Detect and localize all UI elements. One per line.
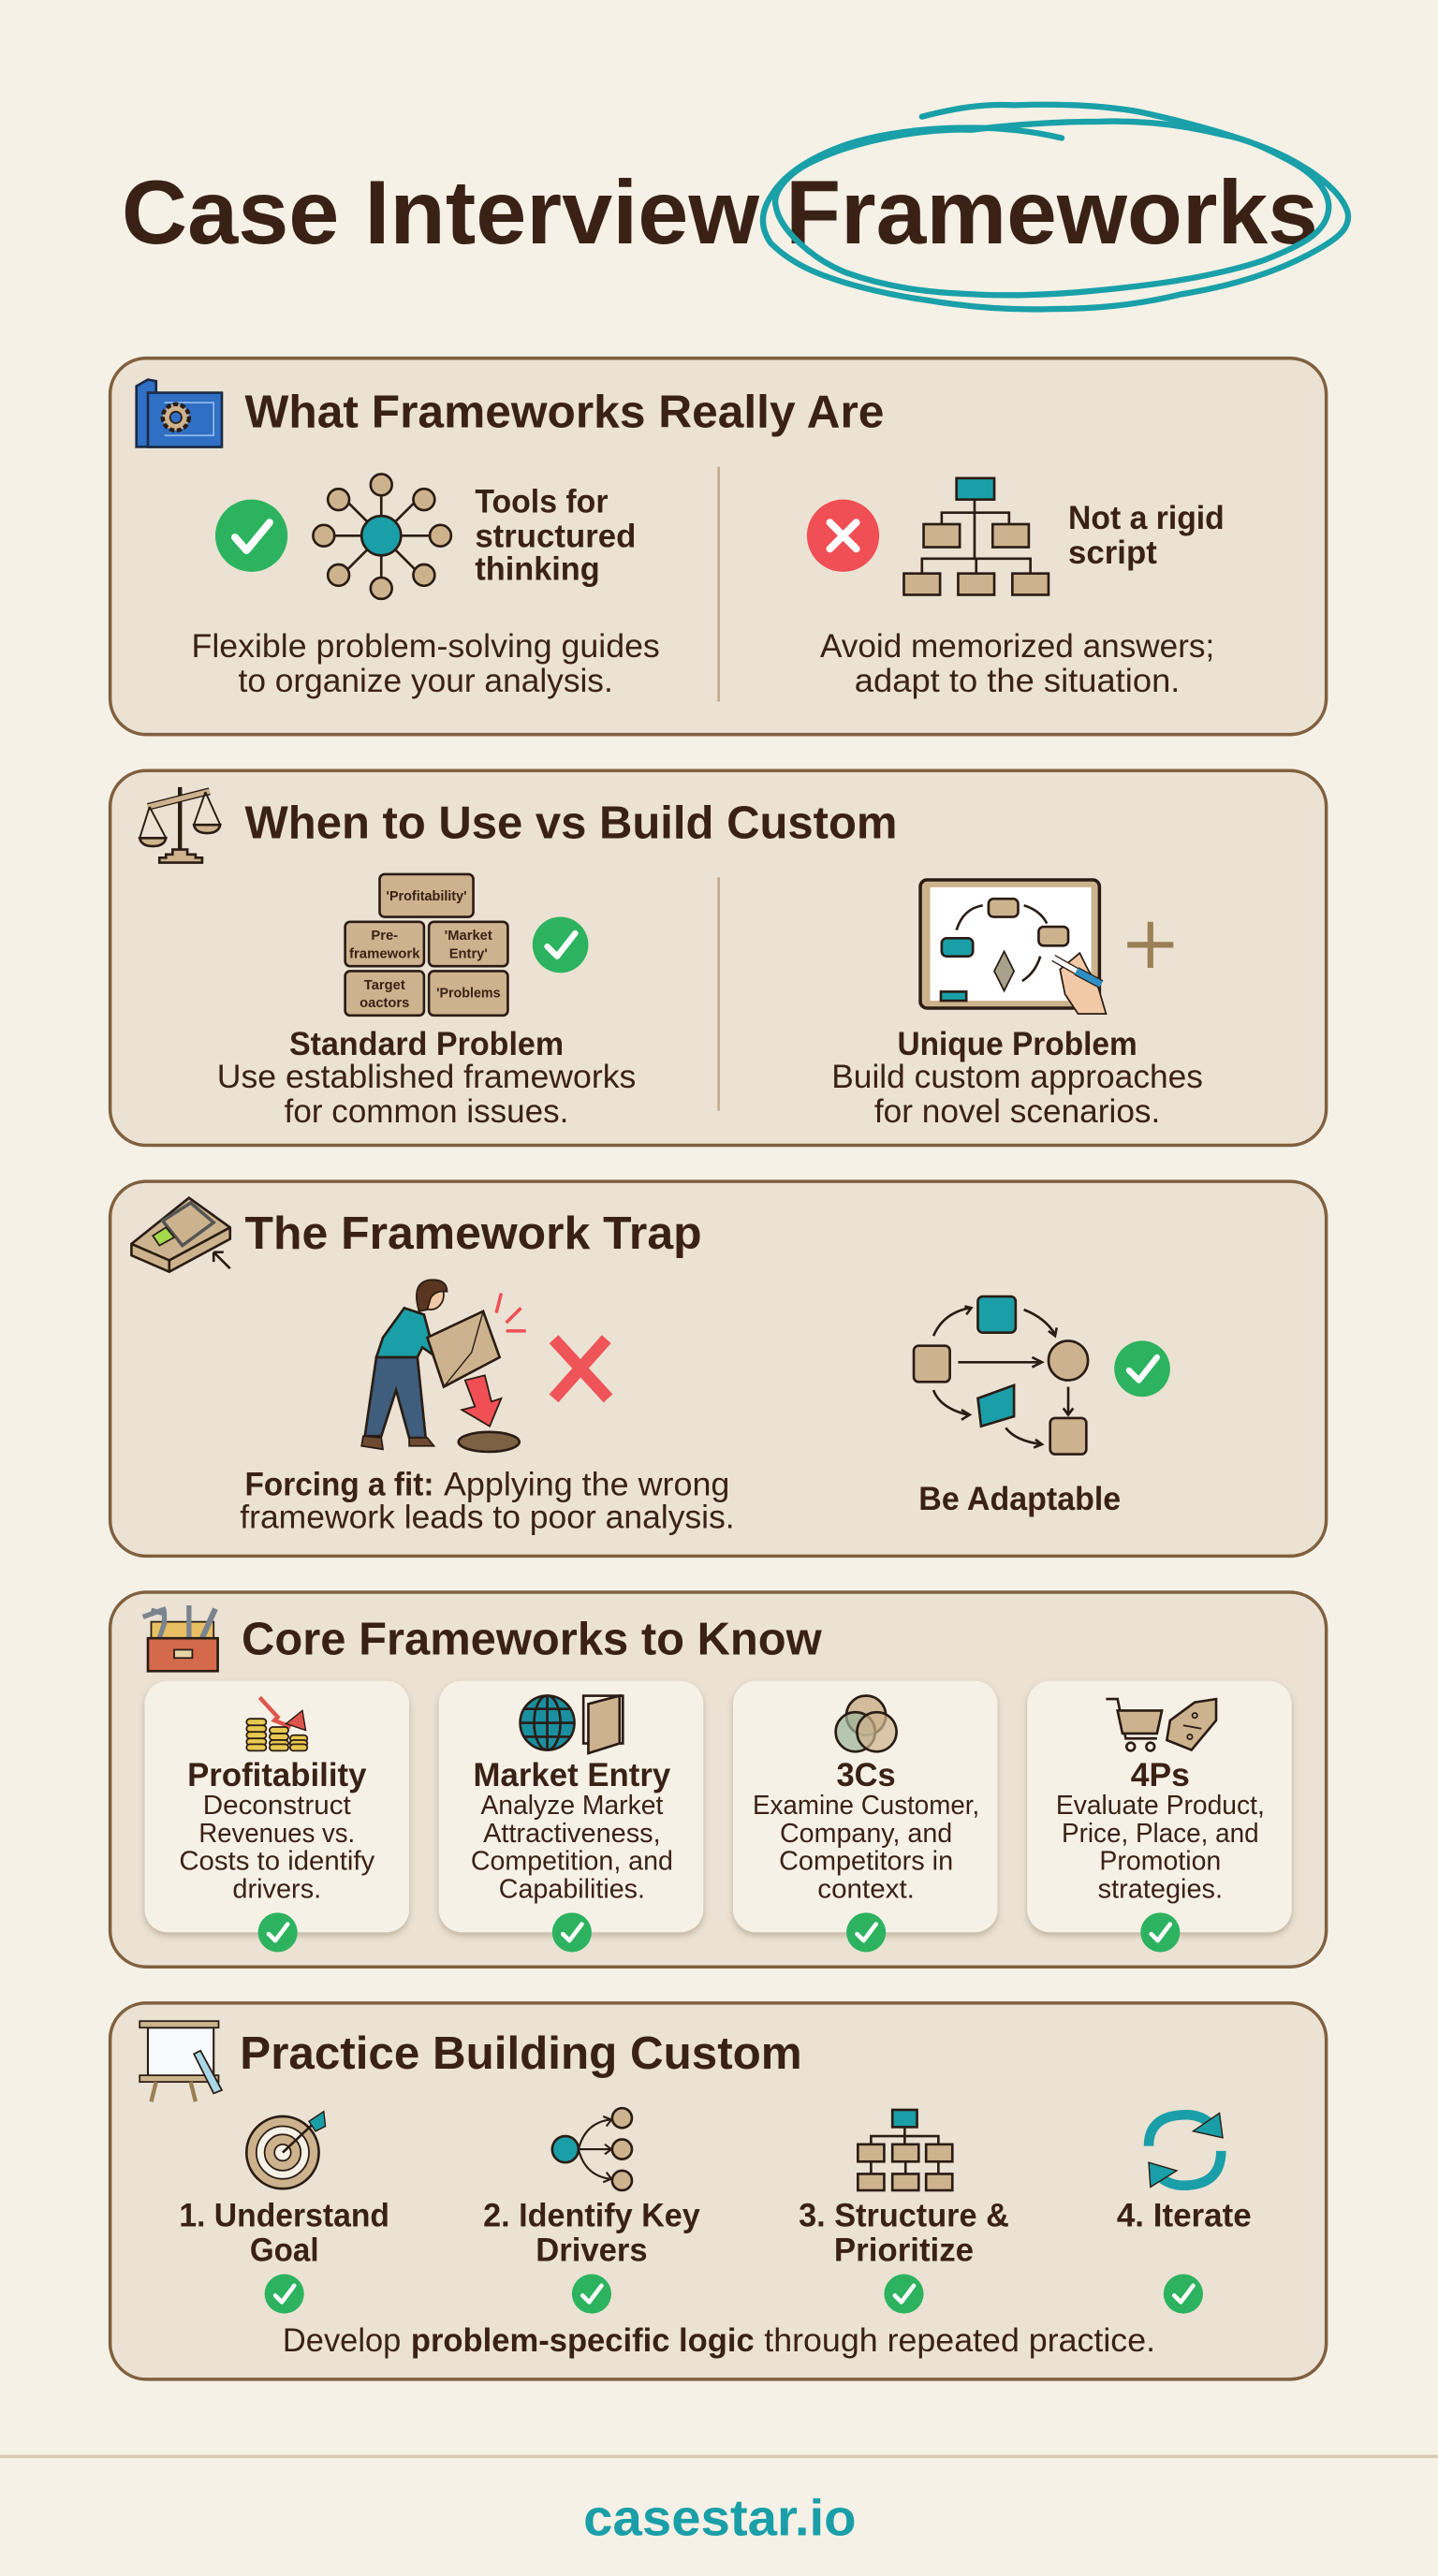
panel: When to Use vs Build Custom	[110, 770, 1327, 1146]
icon: check	[1164, 2275, 1203, 2314]
icon: framework blocks: Pre-	[371, 929, 398, 944]
text: unique problem	[831, 1026, 1203, 1130]
panel: Core Frameworks to Know	[110, 1592, 1327, 1967]
text: Examine Customer,	[753, 1791, 979, 1821]
text: avoid memorized answers	[820, 628, 1214, 699]
icon: tree structure	[858, 2110, 952, 2190]
heading: Practice Building Custom	[240, 2028, 802, 2079]
icon: cycle arrows	[1149, 2113, 1223, 2187]
icon: check	[884, 2275, 924, 2314]
step 1: understand goal	[179, 2112, 389, 2314]
icon: hub and spoke network	[313, 474, 451, 599]
text: Revenues vs.	[198, 1819, 355, 1849]
icon: check	[846, 1912, 886, 1952]
label: 2. Identify Key	[483, 2198, 700, 2234]
icon: framework blocks: 'Market	[445, 929, 492, 944]
icon: framework blocks: oactors	[360, 996, 409, 1011]
text	[1056, 1757, 1265, 1905]
text: avoid memorized answers: Avoid memorized answers;	[820, 628, 1214, 665]
heading: The Framework Trap	[245, 1208, 702, 1259]
icon: mousetrap	[131, 1198, 230, 1272]
icon: toolbox	[143, 1605, 218, 1671]
icon: whiteboard with hand	[920, 880, 1106, 1014]
label: tools for structured thinking: thinking	[475, 551, 600, 588]
label: tools for structured thinking	[475, 484, 636, 588]
card: Profitability	[144, 1681, 409, 1952]
text: develop logic: through repeated practice.	[764, 2322, 1155, 2359]
text: Evaluate Product,	[1056, 1791, 1265, 1821]
icon: cart and price tag	[1106, 1699, 1216, 1750]
text: Competitors in	[779, 1847, 953, 1877]
card: 3Cs	[733, 1681, 998, 1952]
icon: venn diagram	[836, 1696, 897, 1751]
text: Market Entry	[474, 1757, 671, 1793]
label: Prioritize	[834, 2232, 974, 2268]
label: 3. Structure &	[799, 2198, 1009, 2234]
icon: framework blocks: Entry'	[449, 946, 488, 961]
text: develop logic	[283, 2322, 1155, 2359]
text: flexible guides: Flexible problem-solving guides	[192, 628, 660, 665]
heading: What Frameworks Really Are	[245, 387, 884, 437]
text: unique problem: Unique Problem	[897, 1026, 1137, 1062]
label	[799, 2198, 1009, 2268]
text: standard problem	[217, 1026, 636, 1130]
text: Deconstruct	[203, 1791, 351, 1821]
text: standard problem: Use established frameworks	[217, 1059, 636, 1095]
text	[471, 1757, 673, 1905]
icon: framework blocks: framework	[349, 946, 420, 961]
title: Case Interview	[122, 163, 760, 263]
panel: Practice Building Custom	[110, 2003, 1327, 2379]
text: forcing a fit	[240, 1466, 735, 1536]
text: avoid memorized answers: adapt to the situation.	[855, 663, 1180, 699]
text: context.	[817, 1875, 915, 1905]
icon: framework blocks: 'Profitability'	[387, 889, 467, 904]
title	[122, 163, 1318, 263]
label: not a rigid script	[1068, 500, 1225, 571]
text: develop logic: problem-specific logic	[411, 2322, 755, 2359]
label: Goal	[250, 2232, 319, 2268]
icon: falling coins	[246, 1697, 307, 1750]
step 4: iterate	[1117, 2113, 1252, 2314]
icon: easel board	[139, 2021, 222, 2101]
text: standard problem: for common issues.	[285, 1093, 568, 1130]
footer brand: casestar.io	[583, 2490, 857, 2547]
label: not a rigid script: script	[1068, 534, 1157, 571]
title: Frameworks	[785, 163, 1318, 263]
icon: check	[1140, 1912, 1180, 1952]
heading: When to Use vs Build Custom	[245, 798, 897, 848]
panel: What Frameworks Really Are	[110, 359, 1327, 735]
text: Analyze Market	[480, 1791, 663, 1821]
text: Costs to identify	[179, 1847, 375, 1877]
text: flexible guides: to organize your analysis.	[239, 663, 613, 699]
icon: green check	[215, 500, 287, 572]
icon: check	[572, 2275, 611, 2314]
icon: framework blocks: Target	[364, 978, 405, 993]
text	[753, 1757, 979, 1905]
panel: The Framework Trap	[110, 1181, 1327, 1556]
text: unique problem: Build custom approaches	[831, 1059, 1203, 1095]
icon: red X	[554, 1339, 609, 1398]
icon: framework blocks	[345, 874, 507, 1016]
icon: globe and door	[521, 1696, 623, 1753]
step 3: structure and prioritize	[799, 2110, 1009, 2314]
icon: green check	[533, 917, 588, 973]
text: forcing a fit: Applying the wrong	[444, 1466, 729, 1502]
icon: scales	[139, 787, 220, 863]
label: not a rigid script: Not a rigid	[1068, 500, 1225, 536]
label: tools for structured thinking: Tools for	[475, 484, 609, 520]
text: Capabilities.	[499, 1875, 645, 1905]
icon: check	[265, 2275, 304, 2314]
label	[483, 2198, 700, 2268]
hand-drawn circle around Frameworks	[763, 105, 1348, 309]
card: 4Ps	[1027, 1681, 1292, 1952]
text: develop logic: Develop	[283, 2322, 401, 2359]
icon: green check	[1114, 1340, 1170, 1397]
icon: framework blocks: 'Problems	[436, 987, 501, 1002]
text: Promotion	[1099, 1847, 1221, 1877]
label: Drivers	[536, 2232, 648, 2268]
label: 1. Understand	[179, 2198, 389, 2234]
icon: check	[552, 1912, 592, 1952]
text: forcing a fit: framework leads to poor analysis.	[240, 1500, 735, 1536]
text: drivers.	[232, 1875, 321, 1905]
icon: branching drivers	[552, 2108, 632, 2190]
text: Competition, and	[471, 1847, 673, 1877]
text: Company, and	[780, 1819, 952, 1849]
icon: rigid org chart	[903, 478, 1049, 594]
icon: adaptable flow diagram	[914, 1296, 1088, 1455]
label: 4. Iterate	[1117, 2198, 1252, 2234]
text	[179, 1757, 375, 1905]
text: strategies.	[1098, 1875, 1223, 1905]
text: standard problem: Standard Problem	[289, 1026, 564, 1062]
text: Attractiveness,	[483, 1819, 661, 1849]
icon: check	[258, 1912, 298, 1952]
label	[179, 2198, 389, 2268]
step 2: identify key drivers	[483, 2108, 700, 2314]
text: unique problem: for novel scenarios.	[874, 1093, 1160, 1130]
label: tools for structured thinking: structured	[475, 519, 636, 555]
text: 3Cs	[837, 1757, 896, 1793]
icon: blueprint	[137, 380, 222, 446]
icon: red cross	[807, 500, 879, 572]
text: forcing a fit: Forcing a fit:	[245, 1466, 433, 1502]
text: Profitability	[187, 1757, 367, 1793]
icon: target	[246, 2112, 326, 2188]
icon: plus	[1127, 922, 1173, 968]
illustration: person forcing box	[361, 1280, 526, 1452]
text: 4Ps	[1131, 1757, 1190, 1793]
label: be adaptable: Be Adaptable	[918, 1481, 1121, 1517]
text: flexible guides	[192, 628, 660, 699]
text: Price, Place, and	[1062, 1819, 1259, 1849]
heading: Core Frameworks to Know	[242, 1615, 822, 1665]
card: Market Entry	[439, 1681, 703, 1952]
